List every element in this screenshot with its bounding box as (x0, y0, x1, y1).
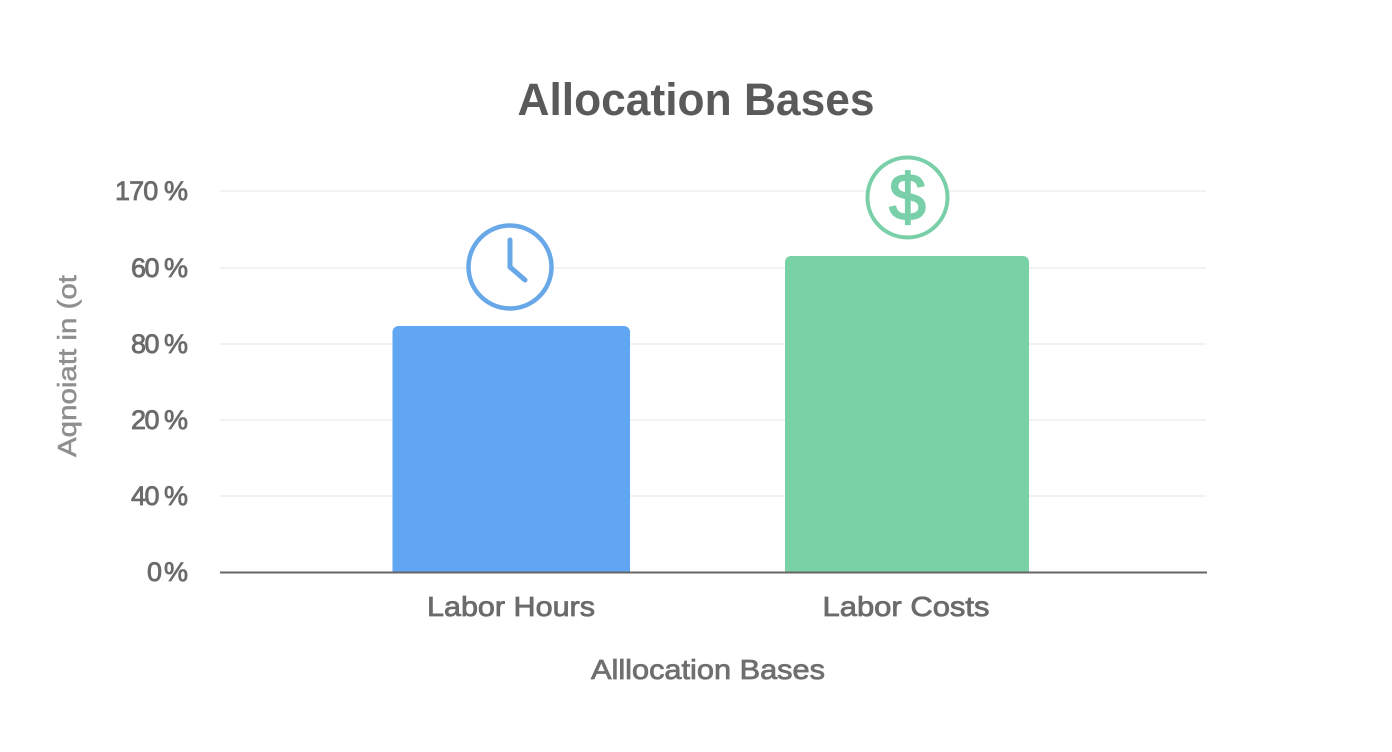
x-axis line (220, 572, 1207, 574)
icon: clock (468, 226, 552, 308)
x-axis category labels: Labor Hours (427, 591, 595, 622)
y-axis labels: 80 % (131, 329, 188, 359)
y-axis labels: 60 % (131, 253, 188, 283)
icon: dollar (868, 158, 948, 238)
icon: dollar: $ (889, 160, 926, 234)
y-axis title: Aqnoiatt in (ot (52, 274, 82, 457)
title: Allocation Bases (518, 74, 874, 125)
bar: Labor Costs (785, 256, 1029, 572)
x-axis category labels (427, 591, 990, 622)
x-axis category labels: Labor Costs (822, 591, 990, 622)
y-axis labels: 170 % (115, 176, 188, 206)
y-axis labels: 0 % (147, 557, 188, 587)
bar: Labor Hours (392, 326, 630, 572)
y-axis labels: 40 % (131, 481, 188, 511)
x-axis title: Alllocation Bases (591, 654, 825, 685)
y-axis labels: 20 % (131, 405, 188, 435)
y-axis labels (115, 176, 188, 587)
